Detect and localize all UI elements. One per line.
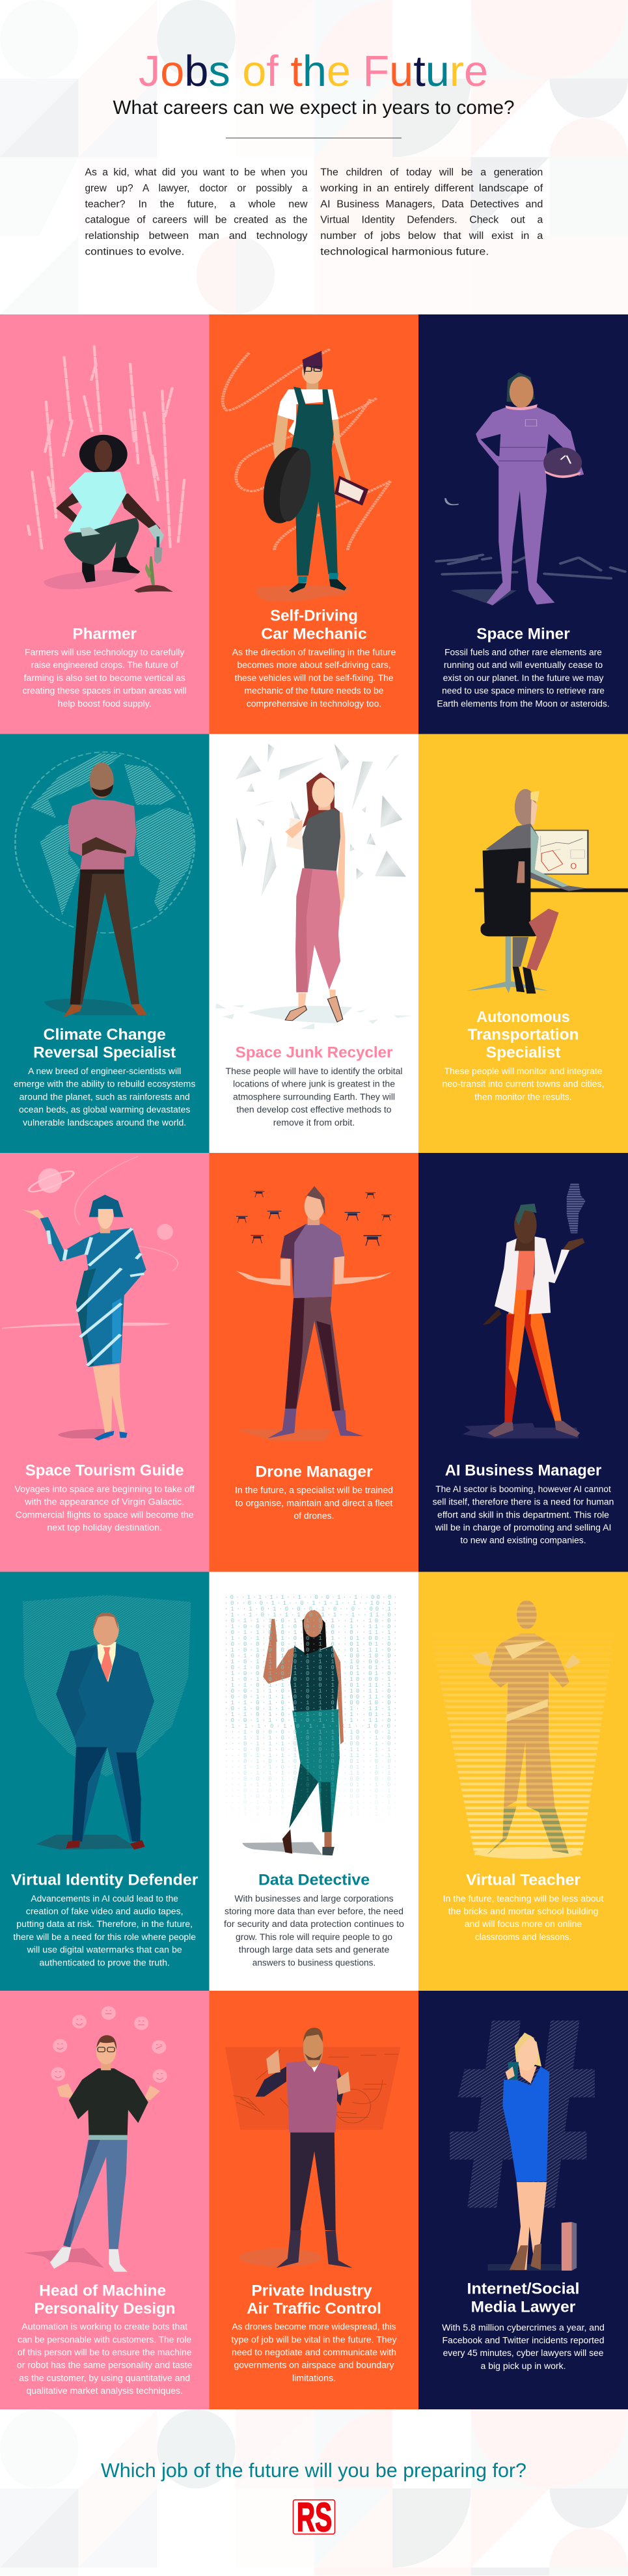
description: These people will monitor and integrate [444,1066,603,1076]
intro text: left column: continues to evolve. [85,246,185,258]
description: every 45 minutes, cyber lawyers will see [443,2348,603,2358]
panel: Space Tourism Guide [0,1153,210,1572]
description: can be personable with customers. The role [18,2334,191,2344]
description: farming is also set to become vertical as [24,673,185,683]
heading: Space Tourism Guide [25,1462,184,1480]
description: Fossil fuels and other rare elements are [444,647,602,658]
panel: Data Detective [210,1572,418,1991]
description [13,1894,196,1967]
binary digits: ·1·0·0·1·0·1·0·0·1··01·01·0· [225,1670,397,1677]
panel: Space Junk Recycler [210,734,418,1153]
description: As drones become more widespread, this [232,2322,396,2332]
heading: Media Lawyer [471,2298,575,2316]
description: with the appearance of Virgin Galactic. [24,1497,184,1507]
heading: Reversal Specialist [33,1044,176,1061]
panel: Drone Manager [210,1153,418,1572]
heading: Private Industry [251,2282,372,2300]
heading: Transportation [467,1026,579,1044]
binary digits: ·1··1·0·1·1·1·0·1·1··1··11·0· [225,1612,397,1618]
description: A new breed of engineer-scientists will [28,1066,181,1076]
description: remove it from orbit. [273,1118,355,1128]
illustration: mechanic with tyre and tablet [223,349,390,602]
binary digits: ·1·0·0·0·1·0·0·1·0··1··11·0· [225,1624,397,1630]
heading: Space Miner [476,626,570,643]
illustration: controller with holographic air map [225,2028,400,2268]
description: Farmers will use technology to carefully [25,647,185,658]
binary digits: ···0·1·1·1·0·1·0·1··00··1·0· [225,1741,397,1747]
description: Earth elements from the Moon or asteroids. [437,699,610,708]
heading: Specialist [486,1044,560,1061]
intro text: right column: The children of today will be a generation [320,167,543,178]
RS logo [293,2495,334,2540]
heading [34,2282,176,2318]
description: next top holiday destination. [47,1523,162,1532]
intro text: left column: As a kid, what did you want to be when you [85,167,307,178]
description: mechanic of the future needs to be [245,686,384,696]
description [437,647,610,708]
heading: Car Mechanic [261,626,367,643]
binary digits: ···0·1·0·1·1·0·0·1··11··0·1· [225,1799,397,1806]
panel: Self-Driving Car Mechanic [210,314,418,734]
illustration: man in front of globe [15,752,195,1018]
description: becomes more about self-driving cars, [237,660,391,670]
description: Commercial flights to space will become the [16,1510,194,1519]
intro text: right column: technological harmonious future. [320,246,489,258]
binary digits: ···0·1·1·1·1·1·1·0··11··1·1· [225,1752,397,1759]
intro text: left column: catalogue of careers will be created as the [85,215,307,226]
subtitle: What careers can we expect in years to come? [113,97,514,118]
binary digits: ···1·1·1·1·1·0·1·1··01··1·0· [225,1782,397,1788]
binary digits: ···1·1·1·0·1·0·1·1··10··1·0· [225,1735,397,1741]
intro text: right column: Virtual Identity Defenders. Check out a [320,215,543,226]
heading: Air Traffic Control [247,2300,381,2318]
description: the bricks and mortar school building [448,1906,598,1917]
description: then develop cost effective methods to [237,1105,392,1115]
binary digits: ·0··1·1·1·1··1··0·0·1··1··00·0· [225,1594,397,1601]
description: these vehicles will not be self-fixing. The [235,673,393,683]
binary digits: ·0··0·0·1·1··0·1·1·1··1··10·1· [225,1600,397,1607]
binary digits: ·1·0·1·0·1·0·0·0·1··10·00·1· [225,1676,397,1683]
heading: Drone Manager [255,1463,373,1480]
description: Advancements in AI could lead to the [31,1894,178,1904]
description: comprehensive in technology too. [247,699,381,708]
binary digits: ·1·1·0·1·1·1·1·0·1··01·11·1· [225,1682,397,1689]
panel: Virtual Identity Defender [0,1572,210,1991]
description: These people will have to identify the orbital [225,1066,402,1076]
intro text: left column: grew up? A lawyer, doctor or possibly a [85,183,308,194]
description: answers to business questions. [253,1958,375,1967]
heading [467,2280,579,2316]
heading: Pharmer [72,626,137,643]
description [224,1894,404,1967]
description: With businesses and large corporations [234,1894,394,1904]
binary digits: ···1·1·1·0·1·1·0·1··01··1·1· [225,1764,397,1771]
illustration: operator seated at monitor [467,789,628,993]
description: as the customer, by using quantitative and [19,2373,190,2383]
background pattern: footer [0,2409,628,2575]
description: or robot has the same personality and taste [17,2361,192,2370]
description [14,1066,196,1128]
description [235,1486,393,1521]
description: creating these spaces in urban areas will [23,686,187,696]
panel: Head of Machine Personality Design [0,1991,210,2409]
description: With 5.8 million cybercrimes a year, and [442,2323,605,2333]
description: sell itself, therefore there is a need for human [433,1497,614,1507]
illustration: man with fleet of drones [236,1186,392,1441]
intro text: left column [85,167,308,258]
heading: Autonomous [476,1008,570,1026]
binary digits: ·0·1·1·1·0·1·1·0·1··1··10·0· [225,1618,397,1624]
intro text: right column [320,167,543,258]
binary digits: ·1·1·0·1·0·0·1·1·0··00·10·0· [225,1700,397,1706]
description: need to use space miners to retrieve rare [442,686,605,696]
binary digits: ·0·1·0·1·1·0·1·0·0··00·10·0· [225,1653,397,1659]
illustration: detective in front of binary data [225,1594,397,1855]
description: atmosphere surrounding Earth. They will [233,1092,395,1101]
description: help boost food supply. [58,699,152,708]
heading: Space Junk Recycler [236,1044,392,1061]
description: In the future, a specialist will be trained [235,1486,393,1495]
illustration: tour guide with planets [2,1156,178,1441]
binary digits: ·0·0·1·1·0·1·0·1·1··1··11·0· [225,1717,397,1724]
heading: Virtual Teacher [466,1871,580,1889]
description [232,647,396,708]
description: The AI sector is booming, however AI cannot [435,1484,611,1494]
binary digits [225,1594,397,1818]
description: there will be a need for this role where people [13,1932,196,1942]
description [443,1066,604,1101]
binary digits: ·0·1·0·1·0·1·1·0·0··01·01·1· [225,1665,397,1671]
title: Jobs of the Future [139,47,488,96]
binary digits: ·1·0·1·0·1·0·0·1·1··01·00·1· [225,1635,397,1642]
illustration: man juggling emoji faces [24,2006,167,2272]
description: exist on our planet. In the future we may [443,673,604,683]
description: governments on airspace and boundary [234,2361,394,2370]
heading [467,1008,579,1061]
panel: Pharmer [0,314,210,734]
intro text: right column: working in an entirely different landscape of [320,183,543,194]
illustration: woman among space junk shards [215,744,413,1029]
binary digits: ·0·0·1·1·1·0·0·1·1··00·11·0· [225,1694,397,1700]
description: then monitor the results. [474,1092,572,1101]
description: to organise, maintain and direct a fleet [236,1498,393,1508]
intro text: left column: teacher? In the future, a whole new [85,199,308,210]
description: will use digital watermarks that can be [27,1945,182,1955]
heading: Self-Driving [270,607,358,624]
description: locations of where junk is greatest in the [233,1079,395,1089]
intro text: right column: number of jobs below that will exist in a [320,230,543,242]
illustration: space miner in purple suit [437,372,625,605]
description: effort and skill in this department. This role [437,1510,609,1519]
description: creation of fake video and audio tapes, [26,1906,184,1917]
description: In the future, teaching will be less about [443,1894,604,1904]
heading [33,1026,176,1061]
binary digits: ···1·0·1·1·0·1·1·1··00··1·0· [225,1794,397,1800]
binary digits: ·1·0·1·0·0·1·0·1·0··01·11·0· [225,1647,397,1654]
description: through large data sets and generate [239,1945,389,1955]
illustration: holographic teacher in light beam [431,1600,615,1859]
description: a big pick up in work. [480,2361,566,2371]
panel: Internet/Social Media Lawyer [418,1991,628,2409]
description [232,2322,397,2383]
description: Facebook and Twitter incidents reported [443,2336,604,2345]
description: of drones. [294,1511,334,1521]
binary digits: ·1·1·1·0·1·0·1·1··11··10·0· [225,1723,397,1730]
background pattern: header [0,0,628,314]
intro text: right column: AI Business Managers, Data Detectives and [320,199,543,210]
binary digits: ·0·1·1·0·0·1·1·1·0··0··11·1· [225,1629,397,1636]
heading: Personality Design [34,2300,176,2318]
description: raise engineered crops. The future of [31,660,178,670]
panel: Virtual Teacher [418,1572,628,1991]
description: running out and will eventually cease to [444,660,603,670]
panel: Autonomous Transportation Specialist [418,734,628,1153]
description: type of job will be vital in the future. They [232,2334,397,2344]
illustration: manager with hologram [463,1184,586,1438]
description: As the direction of travelling in the future [232,647,396,658]
panel: Private Industry Air Traffic Control [210,1991,418,2409]
binary digits: ···0·1·1·1·0·1·1·0··11··0·1· [225,1770,397,1777]
description: qualitative market analysis techniques. [26,2386,183,2396]
panel: Climate Change Reversal Specialist [0,734,210,1153]
binary digits: ···0·0·0·1·0·1·1·0··00··0·0· [225,1776,397,1782]
heading: Data Detective [258,1871,370,1889]
binary digits: ···1·1·1·1·0·1·1·1··10··1·1· [225,1811,397,1818]
binary digits: ···0·1·0·0·1·1·0·0··00··0·1· [225,1788,397,1794]
description: limitations. [292,2373,336,2383]
heading: Head of Machine [39,2282,166,2300]
heading: Virtual Identity Defender [11,1871,198,1889]
panel: Space Miner [418,314,628,734]
description [442,2323,605,2371]
description: ocean beds, as global warming devastates [19,1105,191,1115]
intro text: left column: relationship between man and technology [85,230,308,242]
description: vulnerable landscapes around the world. [23,1118,186,1128]
description [433,1484,614,1545]
description [443,1894,604,1942]
description: authenticated to prove the truth. [39,1958,170,1967]
heading [261,607,367,643]
binary digits: ···0·0·1·0·1·1·0·1··11··1·1· [225,1747,397,1753]
description: and will focus more on online [465,1919,582,1929]
panel: AI Business Manager [418,1153,628,1572]
description: need to negotiate and communicate with [232,2347,396,2357]
closing question: Which job of the future will you be preparing for? [101,2459,526,2482]
description: putting data at risk. Therefore, in the future, [16,1919,193,1929]
binary digits: ···1·0·1·0·1·1·1·0··01··1·0· [225,1805,397,1812]
binary digits: ·0·0·1·1·0·1·0·1·1··10·11·0· [225,1688,397,1695]
illustration: man in suit with shield [23,1595,191,1849]
description [17,2322,192,2396]
description: grow. This role will require people to go [236,1932,392,1942]
description: to new and existing companies. [460,1536,586,1545]
binary digits: ·0·1·0·1·1·1·0·1·1··1··11·1· [225,1706,397,1712]
description [225,1066,402,1128]
description: storing more data than ever before, the need [225,1906,403,1917]
binary digits: ·1·0·1·1·1·0·0·1·1··10·00·1· [225,1659,397,1665]
description: classrooms and lessons. [475,1932,571,1942]
description: Voyages into space are beginning to take off [15,1484,195,1494]
description: emerge with the ability to rebuild ecosystems [14,1079,196,1089]
RS logo: RS [297,2495,332,2540]
description: will be in charge of promoting and selling AI [435,1523,611,1532]
illustration: lawyer with hashtag and briefcase [450,2021,595,2271]
binary digits: ···1·0·0·0·0·1·1·1··10··0·1· [225,1729,397,1736]
description: for security and data protection continues to [224,1919,404,1929]
binary digits: ·0·0·0·1·0·1·0·1·0··01·01·0· [225,1641,397,1648]
illustration: pharmer crouching with trowel [28,346,184,592]
binary digits: ···0·1·0·1·0·1·0·0··01··0·0· [225,1758,397,1765]
description: neo-transit into current towns and cities, [443,1079,604,1089]
binary digits: ·1··1·0·1·0·0·0·1·0··0··00·1· [225,1606,397,1613]
description: of this person will be to ensure the machine [18,2347,192,2357]
description [15,1484,195,1532]
binary digits: ·1·1·0·1·0·1·1·0·1··1··01·1· [225,1711,397,1718]
heading [247,2282,381,2318]
description: around the planet, such as rainforests and [20,1092,190,1101]
heading: Climate Change [44,1026,166,1044]
heading: Internet/Social [467,2280,579,2298]
description [23,647,187,708]
description: Automation is working to create bots that [21,2322,187,2332]
heading: AI Business Manager [445,1462,601,1480]
